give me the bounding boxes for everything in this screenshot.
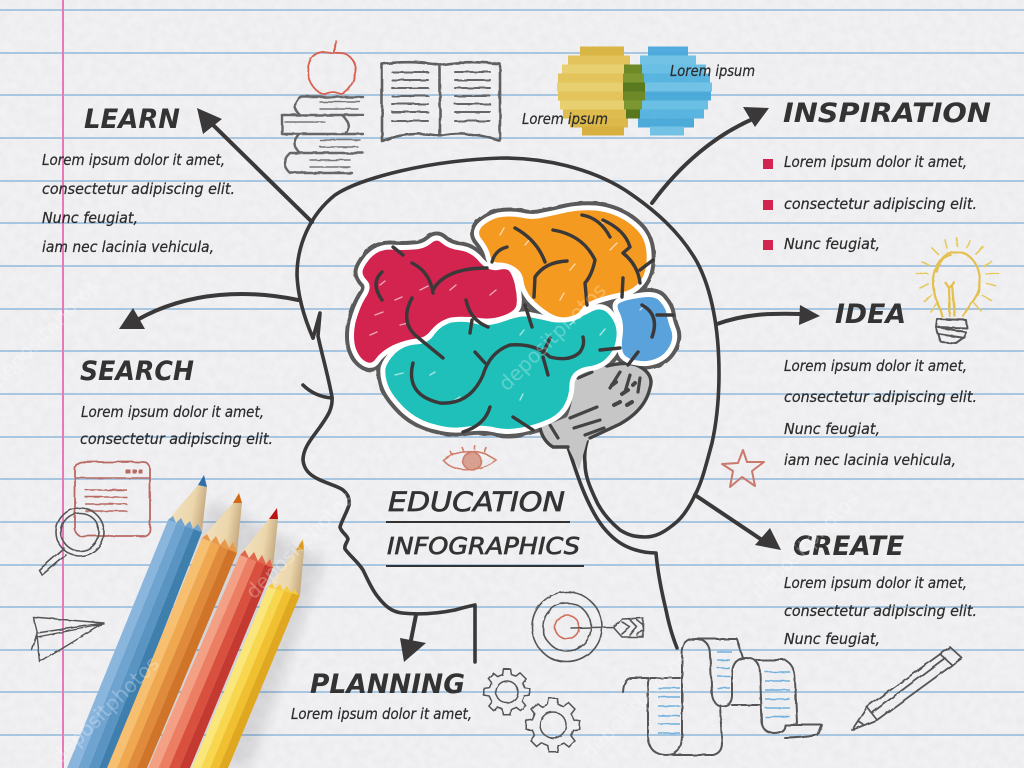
watercolor venn circles (522, 51, 755, 131)
brain (352, 208, 675, 470)
arrow: search (119, 294, 298, 329)
label: Lorem ipsum (670, 62, 755, 80)
panel: inspiration (652, 98, 991, 253)
heading: create: CREATE (793, 531, 905, 562)
text block: search: consectetur adipiscing elit. (80, 430, 273, 448)
bullet list: inspiration: Lorem ipsum dolor it amet, (784, 153, 967, 171)
text block: idea: consectetur adipiscing elit. (784, 388, 977, 406)
icon: gears (484, 669, 580, 752)
icon: books and apple (282, 41, 363, 173)
arrow: create (695, 495, 781, 550)
blue watercolor circle (634, 51, 712, 131)
watermarks: depositphotos (577, 646, 694, 764)
overlap (623, 69, 645, 114)
text block: idea: Nunc feugiat, (784, 420, 880, 438)
panel: learn (42, 104, 312, 256)
pencil: red (148, 508, 278, 768)
arrow: idea (717, 305, 820, 325)
red lobe (352, 238, 519, 365)
text block: learn: iam nec lacinia vehicula, (42, 238, 214, 256)
panel: planning (291, 615, 472, 723)
heading: planning: PLANNING (310, 669, 465, 700)
icon: eye (443, 445, 496, 470)
panel: idea (717, 299, 977, 469)
watermarks: depositphotos (747, 486, 864, 604)
text block: create: Nunc feugiat, (784, 630, 880, 648)
icon: paper plane (32, 617, 104, 662)
bullet list: inspiration: Nunc feugiat, (784, 235, 880, 253)
watermarks: depositphotos (494, 278, 611, 396)
orange lobe (476, 208, 649, 320)
blue lobe (615, 295, 675, 364)
icon: sketched pencil (852, 647, 962, 730)
label: Lorem ipsum (522, 110, 608, 128)
text block: learn (42, 151, 235, 256)
text block: idea: iam nec lacinia vehicula, (784, 451, 956, 469)
title: education infographics: INFOGRAPHICS (387, 534, 580, 560)
text block: planning: Lorem ipsum dolor it amet, (291, 705, 472, 723)
text block: create (784, 574, 977, 648)
pencil shadow (95, 500, 325, 768)
watermarks: depositphotos (241, 486, 358, 604)
pencil: yellow (192, 539, 304, 768)
teal lobe (383, 307, 619, 432)
arrow: inspiration (652, 107, 769, 203)
icon: paper scroll (623, 639, 822, 755)
arrow: learn (197, 108, 312, 222)
heading: inspiration: INSPIRATION (783, 98, 991, 129)
title: education infographics (386, 487, 584, 566)
pencil: blue (67, 475, 207, 768)
bullet list: inspiration (763, 153, 977, 253)
pencils (67, 475, 325, 768)
icon: target and dart (532, 592, 643, 662)
heading: idea: IDEA (835, 299, 906, 330)
text block: search: Lorem ipsum dolor it amet, (81, 403, 264, 421)
heading: search: SEARCH (80, 356, 194, 387)
bullet list: inspiration: consectetur adipiscing elit. (784, 195, 977, 213)
icon: star (722, 450, 764, 487)
arrow: planning (400, 615, 426, 662)
text block: create: consectetur adipiscing elit. (784, 602, 977, 620)
text block: learn: consectetur adipiscing elit. (42, 180, 235, 198)
text block: learn: Nunc feugiat, (42, 209, 138, 227)
text block: idea (784, 357, 977, 469)
panel: search (80, 294, 298, 448)
gyri fold lines (376, 215, 673, 432)
chalk speckle (370, 221, 645, 400)
icon: open book (382, 62, 500, 141)
cerebellum and brain stem (540, 363, 651, 470)
text block: idea: Lorem ipsum dolor it amet, (784, 357, 967, 375)
pencil: orange (107, 493, 242, 768)
icon: light bulb (916, 238, 998, 343)
text block: learn: Lorem ipsum dolor it amet, (42, 151, 225, 169)
brain sketch outline (352, 208, 675, 432)
watermarks: depositphotos (47, 651, 164, 768)
text block: search (80, 403, 273, 448)
watermarks (0, 274, 864, 768)
yellow watercolor circle (557, 51, 635, 131)
text block: create: Lorem ipsum dolor it amet, (784, 574, 967, 592)
title: education infographics: EDUCATION (388, 487, 565, 518)
panel: create (695, 495, 977, 648)
icon: browser window and magnifier (39, 462, 150, 575)
head outline (297, 158, 719, 662)
heading: learn: LEARN (84, 104, 180, 135)
